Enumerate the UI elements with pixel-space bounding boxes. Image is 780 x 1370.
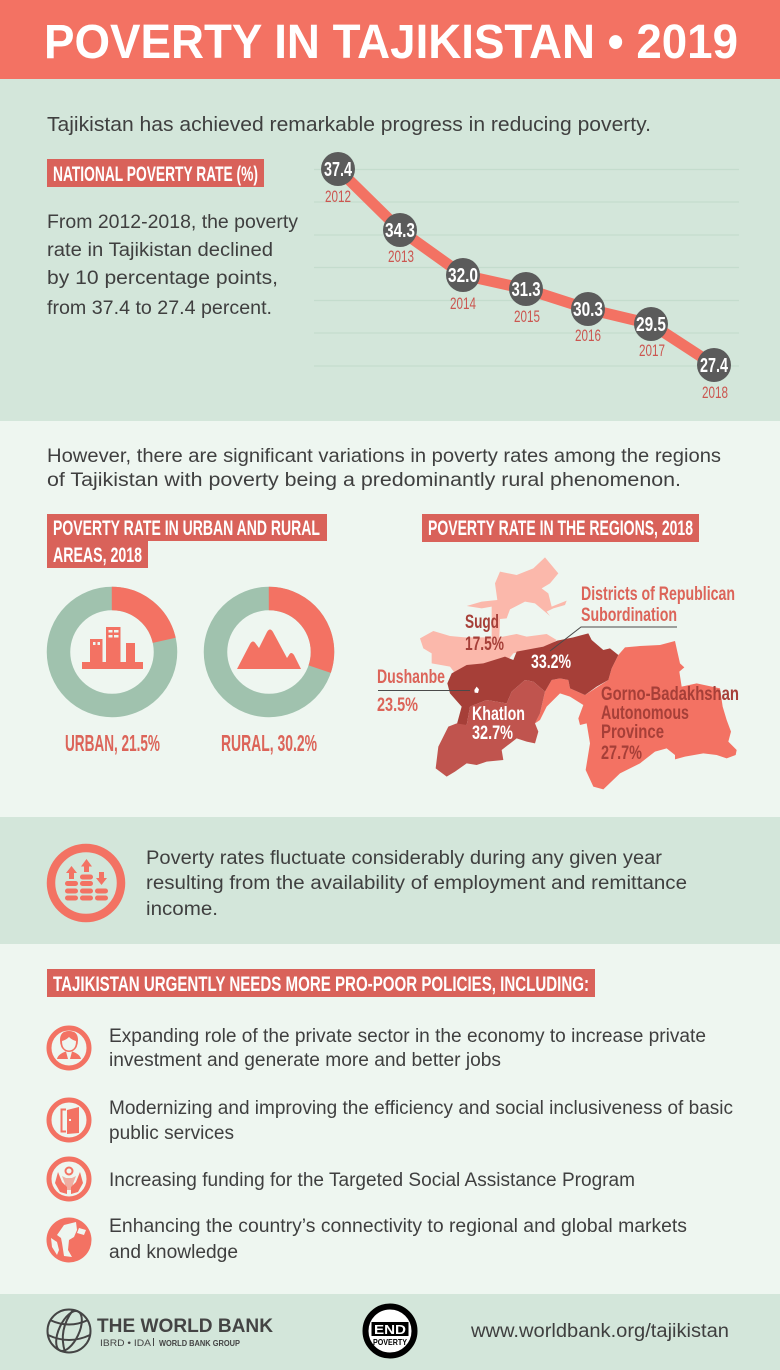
label: Khatlon <box>472 704 525 744</box>
label: Sugd: 17.5% <box>465 634 504 655</box>
text: fluctuation: Poverty rates fluctuate considerably during any given year <box>146 848 663 869</box>
text: fluctuation: income. <box>146 899 218 920</box>
text: regional variations <box>47 446 721 491</box>
text: poverty rate decline: rate in Tajikistan declined <box>47 240 273 261</box>
line chart: national poverty rate: 2017 <box>639 341 665 360</box>
title: POVERTY IN TAJIKISTAN • 2019 <box>44 16 738 69</box>
line chart: national poverty rate: 2016 <box>575 326 601 345</box>
icon: fluctuating coins <box>51 848 121 918</box>
label: urban: URBAN, 21.5% <box>65 730 160 756</box>
region: Dushanbe <box>474 687 479 693</box>
text: poverty rate decline: From 2012-2018, the poverty <box>47 212 299 233</box>
label: Districts of Republican Subordination: Subordination <box>581 605 677 626</box>
donut chart: rural <box>216 598 322 706</box>
text: poverty rate decline: from 37.4 to 27.4 percent. <box>47 298 272 319</box>
footer URL: www.worldbank.org/tajikistan <box>470 1321 729 1342</box>
line chart: national poverty rate <box>314 152 739 402</box>
heading: urban and rural <box>47 514 327 568</box>
icon: businessperson <box>49 1028 89 1068</box>
label: Gorno-Badakhshan: Province <box>601 722 664 743</box>
label: Khatlon: 32.7% <box>472 723 513 744</box>
text: public services <box>109 1098 733 1144</box>
text: connectivity: and knowledge <box>109 1242 238 1263</box>
text: poverty rate decline: by 10 percentage points, <box>47 268 278 289</box>
donut chart: urban <box>58 598 166 706</box>
icon: city buildings <box>82 627 143 669</box>
logo: End Poverty <box>366 1306 414 1356</box>
text: regional variations: of Tajikistan with poverty being a predominantly rural phenomenon. <box>47 470 681 491</box>
region: Districts of Republican Subordination <box>447 633 618 725</box>
line chart: national poverty rate: 37.4 <box>324 159 353 181</box>
label: Districts of Republican Subordination <box>581 584 735 626</box>
heading: urban and rural: AREAS, 2018 <box>53 544 142 567</box>
text: public services: public services <box>109 1123 234 1144</box>
label: Sugd: Sugd <box>465 612 499 633</box>
label: Khatlon: Khatlon <box>472 704 525 725</box>
text: connectivity <box>109 1216 687 1263</box>
text: private sector <box>109 1026 706 1071</box>
heading: national poverty rate: NATIONAL POVERTY RATE (%) <box>53 163 258 186</box>
logo: World Bank: THE WORLD BANK <box>97 1316 273 1337</box>
heading: urban and rural: POVERTY RATE IN URBAN AND RURAL <box>53 517 320 540</box>
text: social assistance: Increasing funding for the Targeted Social Assistance Program <box>109 1170 635 1191</box>
intro text: Tajikistan has achieved remarkable progress in reducing poverty. <box>47 114 651 136</box>
line chart: national poverty rate: 2018 <box>702 383 728 402</box>
line chart: national poverty rate: 27.4 <box>700 355 729 377</box>
heading: pro-poor policies: TAJIKISTAN URGENTLY NEEDS MORE PRO-POOR POLICIES, INCLUDING: <box>53 973 589 996</box>
line chart: national poverty rate: 2014 <box>450 294 476 313</box>
text: public services: Modernizing and improving the efficiency and social inclusiveness of basic <box>109 1098 733 1119</box>
line chart: national poverty rate: 32.0 <box>448 265 478 287</box>
logo: World Bank: IBRD • IDA <box>100 1338 152 1349</box>
map: regions of Tajikistan <box>377 557 739 789</box>
line chart: national poverty rate: 2013 <box>388 247 414 266</box>
text: fluctuation: resulting from the availability of employment and remittance <box>146 873 687 894</box>
logo: World Bank <box>48 1307 273 1355</box>
region: Khatlon <box>436 680 545 777</box>
title <box>0 0 780 79</box>
label: Dushanbe <box>377 667 445 716</box>
icon: mountains <box>237 630 301 669</box>
label: Gorno-Badakhshan: Gorno-Badakhshan <box>601 684 739 705</box>
line chart: national poverty rate: 29.5 <box>636 314 666 336</box>
logo: World Bank: WORLD BANK GROUP <box>159 1339 241 1348</box>
region: Gorno-Badakhshan <box>535 641 737 789</box>
label: Dushanbe: Dushanbe <box>377 667 445 688</box>
heading: pro-poor policies <box>47 969 595 997</box>
line chart: national poverty rate: 31.3 <box>512 279 540 301</box>
icon: globe <box>46 1218 92 1262</box>
heading: national poverty rate <box>47 159 264 187</box>
line chart: national poverty rate: 2015 <box>514 307 540 326</box>
text: poverty rate decline <box>47 212 299 319</box>
text: private sector: investment and generate more and better jobs <box>109 1050 501 1071</box>
label: rural: RURAL, 30.2% <box>221 730 317 756</box>
text: private sector: Expanding role of the private sector in the economy to increase private <box>109 1026 706 1047</box>
leader lines <box>378 627 677 690</box>
label: Dushanbe: 23.5% <box>377 695 418 716</box>
text: fluctuation <box>146 848 687 920</box>
line chart: national poverty rate: 30.3 <box>573 299 603 321</box>
heading: regions <box>422 514 699 542</box>
logo: End Poverty: POVERTY <box>373 1338 408 1347</box>
label: 33.2 percent: 33.2% <box>531 652 571 673</box>
text: connectivity: Enhancing the country’s connectivity to regional and global markets <box>109 1216 687 1237</box>
line chart: national poverty rate: 34.3 <box>385 220 415 242</box>
region: Sugd <box>420 557 567 673</box>
label: Gorno-Badakhshan <box>601 684 739 764</box>
icon: door <box>49 1100 89 1140</box>
label: Gorno-Badakhshan: Autonomous <box>601 703 689 724</box>
line chart: national poverty rate: 2012 <box>325 187 351 206</box>
label: Gorno-Badakhshan: 27.7% <box>601 743 642 764</box>
text: regional variations: However, there are significant variations in poverty rates among the regions <box>47 446 721 467</box>
label: Sugd <box>465 612 504 655</box>
icon: globe <box>48 1307 90 1355</box>
logo: End Poverty: END <box>374 1322 406 1337</box>
icon: hands holding person <box>49 1159 89 1199</box>
